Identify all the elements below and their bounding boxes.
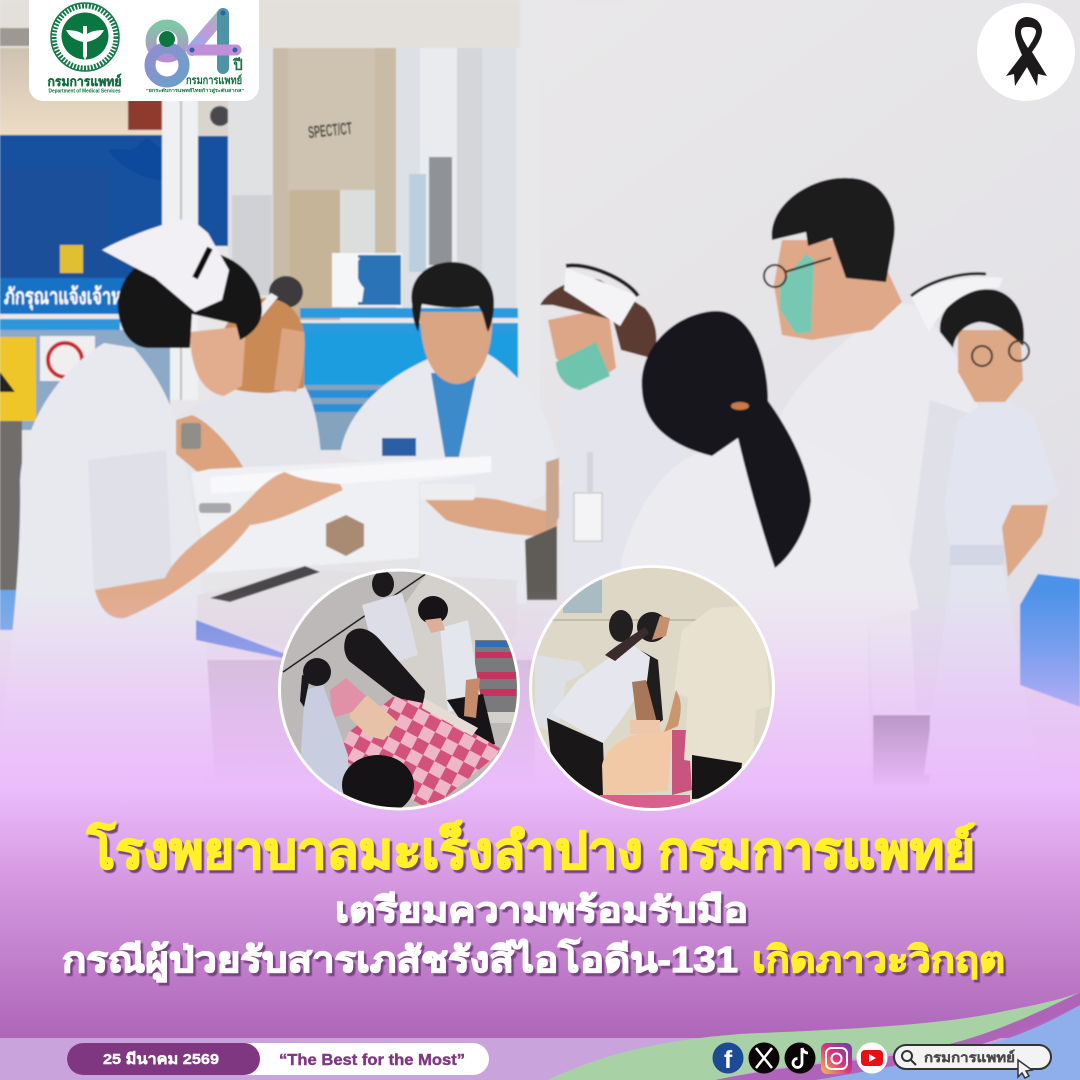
- headline line 3: กรณีผู้ป่วยรับสารเภสัชรังสีไอโอดีน-131: [62, 938, 738, 983]
- leaning staff member hair: [344, 628, 425, 709]
- date and slogan pill: [67, 1043, 489, 1075]
- logo: Ministry of Public Health seal: [51, 3, 119, 71]
- manikin: [350, 696, 398, 740]
- photo circle: CPR training on manikin: [525, 560, 780, 820]
- CPR manikin: [600, 720, 692, 808]
- slogan: “The Best for the Most”: [279, 1052, 465, 1069]
- headline line 1: โรงพยาบาลมะเร็งลำปาง กรมการแพทย์: [86, 820, 975, 879]
- decorative wave: green, purple and blue: [548, 992, 1080, 1080]
- hand and forearm: [95, 472, 343, 618]
- person: tall man with glasses: [764, 178, 981, 785]
- social media icons: [712, 1042, 888, 1074]
- back nurse: [609, 610, 663, 730]
- equipment cart: [475, 640, 517, 712]
- 84 years label: ปี: [232, 57, 243, 74]
- icon: TikTok: [784, 1042, 816, 1074]
- icon: Facebook: [712, 1042, 744, 1074]
- person: doctor in white coat: [340, 262, 562, 604]
- floor below the table: [205, 660, 535, 795]
- search bar: [894, 1045, 1051, 1078]
- icon: X: [748, 1042, 780, 1074]
- date: 25 มีนาคม 2569: [103, 1051, 219, 1068]
- staff member on the right: [418, 596, 495, 748]
- person: nurse with glasses: [911, 274, 1059, 775]
- wall and floor: [281, 572, 517, 808]
- headline line 3 highlight: เกิดภาวะวิกฤต: [752, 939, 1005, 980]
- 84 logo department name: กรมการแพทย์: [186, 74, 242, 87]
- foreground hair: [342, 755, 414, 808]
- department name in English: Department of Medical Services: [48, 88, 120, 94]
- icon: cursor: [1018, 1060, 1032, 1078]
- instructor in beige coat: [664, 606, 770, 799]
- person: front nurse holding box: [0, 218, 262, 780]
- lilac gradient fade over photo: [0, 590, 1080, 790]
- photo circle: patient bed simulation: [278, 568, 520, 810]
- bottom strip: [0, 1038, 1080, 1080]
- white translucent box: [191, 456, 491, 573]
- headline line 2: เตรียมความพร้อมรับมือ: [335, 891, 748, 930]
- nurse compressing chest: [547, 612, 670, 799]
- person: blond nurse: [172, 276, 322, 490]
- top-left logo panel: [29, 0, 259, 101]
- department name in Thai: กรมการแพทย์: [48, 73, 122, 89]
- sign text: ภักรุณาแจ้งเจ้าห: [4, 284, 122, 311]
- room background: [0, 0, 1080, 800]
- icon: magnifier: [902, 1051, 916, 1065]
- blue counter signs and stripes: [0, 245, 518, 630]
- black mourning ribbon badge: [977, 3, 1075, 101]
- person: nurse with mask: [525, 265, 689, 604]
- 84 logo tagline: "ยกระดับการแพทย์ไทยก้าวสู่ระดับสากล": [146, 87, 244, 94]
- checkered bed: [337, 697, 503, 810]
- SPECT/CT door sign: SPECT/CT: [307, 119, 353, 142]
- observer on left: [535, 655, 586, 732]
- logo: 84 years anniversary: [150, 10, 238, 82]
- person: ponytail woman: [620, 311, 919, 781]
- treatment table: [196, 566, 517, 680]
- room: [532, 568, 772, 808]
- icon: YouTube: [856, 1042, 888, 1074]
- purple lower panel: [0, 788, 1080, 1038]
- nurse on the left: [300, 658, 348, 805]
- blue chair: [1020, 574, 1080, 707]
- icon: Instagram: [821, 1043, 852, 1074]
- staff member at the back: [362, 571, 418, 665]
- bed rail: [422, 698, 478, 736]
- icon: Facebook: f: [724, 1046, 733, 1074]
- search text: กรมการแพทย์: [924, 1049, 1015, 1065]
- background photo: hospital team around a box: [0, 0, 1080, 800]
